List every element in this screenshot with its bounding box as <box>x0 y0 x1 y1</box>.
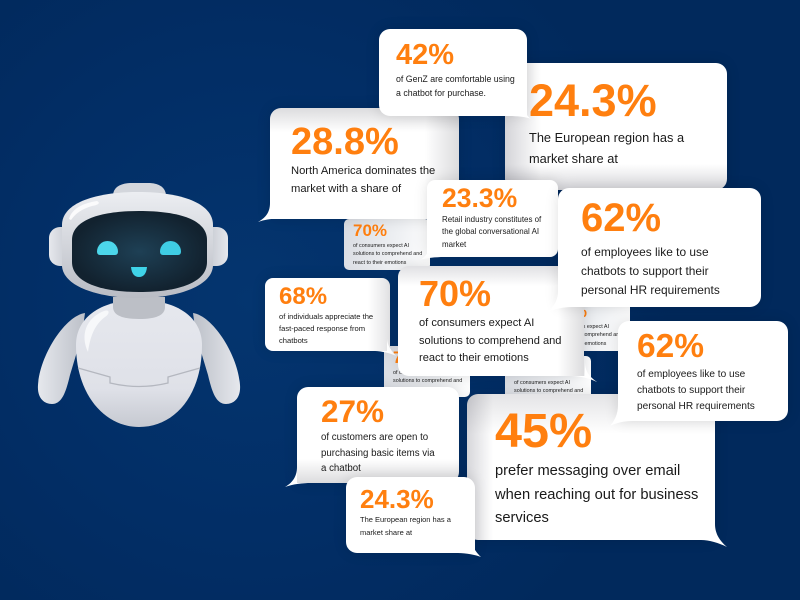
description: market share at <box>360 528 412 536</box>
body <box>76 300 202 427</box>
description: market share at <box>529 150 618 166</box>
right arm <box>193 313 240 404</box>
tail <box>702 524 727 547</box>
description <box>529 130 684 166</box>
description: Retail industry constitutes of <box>442 215 541 224</box>
description: of consumers expect AI <box>553 324 609 330</box>
bubble: 24.3% Europe <box>505 63 727 190</box>
bubble: 70% consumers <box>398 266 584 376</box>
tail <box>458 550 481 557</box>
description <box>419 317 561 364</box>
bubble: 45% messaging <box>467 394 715 540</box>
description <box>353 243 422 266</box>
description <box>581 244 720 296</box>
background bubble: 70% upper <box>344 219 430 270</box>
description <box>514 380 583 403</box>
description: North America dominates the <box>291 165 435 177</box>
description <box>637 369 755 412</box>
description: of employees like to use <box>637 369 745 380</box>
left ear <box>49 227 75 266</box>
left arm <box>38 313 85 404</box>
figure: 23.3% <box>442 183 517 213</box>
description: solutions to comprehend and <box>553 332 622 338</box>
description: services <box>495 510 549 526</box>
bubble: 62% employees lower <box>618 321 788 421</box>
description: prefer messaging over email <box>495 463 680 479</box>
bubble: 28.8% North America <box>270 108 459 219</box>
description: when reaching out for business <box>495 486 698 502</box>
figure: 70% <box>393 348 427 367</box>
figure: 62% <box>637 328 704 365</box>
bubble: 68% individuals <box>265 278 390 351</box>
description: of consumers expect AI <box>514 380 570 386</box>
description: a chatbot for purchase. <box>396 88 486 98</box>
description: purchasing basic items via <box>321 448 435 458</box>
description: react to their emotions <box>419 352 529 364</box>
description <box>393 370 462 393</box>
right ear <box>202 227 228 266</box>
mouth <box>131 267 147 277</box>
description: react to their emotions <box>353 260 406 266</box>
description: of consumers expect AI <box>353 243 409 249</box>
tail <box>258 204 271 222</box>
background bubble: 70% right <box>544 300 630 351</box>
figure: 27% <box>321 393 384 429</box>
left eye <box>97 241 118 255</box>
screen <box>72 211 207 292</box>
bubble: 23.3% retail <box>427 180 558 257</box>
neck <box>113 297 165 319</box>
figure: 68% <box>279 282 327 310</box>
figure: 24.3% <box>529 75 657 126</box>
description: of customers are open to <box>321 432 428 443</box>
body highlight <box>85 311 109 352</box>
description: The European region has a <box>360 515 451 524</box>
figure: 70% <box>419 272 491 314</box>
description <box>442 215 542 249</box>
description: solutions to comprehend and <box>393 378 462 384</box>
description: market <box>442 240 466 249</box>
description: of individuals appreciate the <box>279 312 373 321</box>
figure: 42% <box>396 38 454 70</box>
description <box>495 463 698 526</box>
background bubble: 70% lower right <box>505 356 591 407</box>
description: the global conversational AI <box>442 227 539 236</box>
description: of employees like to use <box>581 244 709 258</box>
description: solutions to comprehend and <box>353 251 422 257</box>
figure: 70% <box>353 221 387 240</box>
description: solutions to comprehend and <box>514 388 583 394</box>
description <box>553 324 622 347</box>
figure: 45% <box>495 404 592 458</box>
description: react to their emotions <box>514 397 567 403</box>
description: chatbots to support their <box>581 264 709 278</box>
bubble: 42% GenZ <box>379 29 527 116</box>
tail <box>612 408 628 424</box>
bubble: 27% customers <box>297 387 459 483</box>
description: fast-paced response from <box>279 324 365 333</box>
description: market with a share of <box>291 182 401 194</box>
tail <box>376 340 396 356</box>
belt line <box>78 368 200 386</box>
top cap <box>113 183 166 195</box>
head <box>62 192 213 298</box>
robot illustration <box>38 183 240 427</box>
description: of consumers expect AI <box>419 317 534 329</box>
description <box>396 74 515 98</box>
tail <box>575 366 596 382</box>
description: of consumers expect AI <box>393 370 449 376</box>
tail <box>424 254 440 258</box>
description: react to their emotions <box>393 387 446 393</box>
tail <box>513 116 530 118</box>
bubble: 62% employees upper <box>558 188 761 307</box>
right eye <box>160 241 181 255</box>
description <box>279 312 373 345</box>
head highlight <box>69 201 99 220</box>
figure: 70% <box>514 358 548 377</box>
description <box>360 515 451 536</box>
figure: 70% <box>553 302 587 321</box>
description: solutions to comprehend and <box>419 335 561 347</box>
figure: 24.3% <box>360 484 434 514</box>
description <box>291 165 435 194</box>
description: chatbots to support their <box>637 385 745 396</box>
figure: 28.8% <box>291 121 399 163</box>
description: a chatbot <box>321 463 361 474</box>
tail <box>285 468 308 487</box>
bubble: 24.3% Europe small <box>346 477 475 553</box>
figure: 62% <box>581 196 661 240</box>
description: personal HR requirements <box>637 401 755 412</box>
description: react to their emotions <box>553 341 606 347</box>
tail <box>556 295 568 308</box>
description: personal HR requirements <box>581 282 720 296</box>
description: The European region has a <box>529 130 684 145</box>
background bubble: 70% lower left <box>384 346 470 397</box>
description: chatbots <box>279 336 308 345</box>
description: of GenZ are comfortable using <box>396 74 515 84</box>
description <box>321 432 435 474</box>
